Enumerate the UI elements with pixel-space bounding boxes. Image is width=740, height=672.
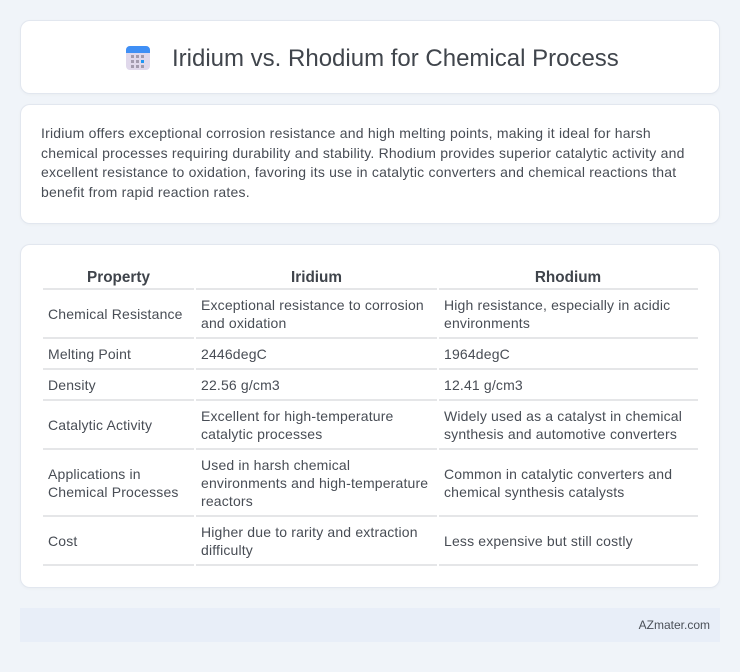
- row: melting point: Melting Point: [48, 346, 131, 362]
- chemical resistance: rhodium: [444, 297, 670, 331]
- applications: iridium: Used in harsh chemical: [201, 457, 350, 473]
- summary text: [41, 125, 685, 200]
- icon: calendar grid: [126, 46, 150, 70]
- row: applications in chemical processes: [48, 466, 179, 500]
- table header: rhodium: Rhodium: [535, 269, 601, 286]
- applications: iridium: [201, 457, 428, 509]
- row: applications in chemical processes: Applications in: [48, 466, 141, 482]
- catalytic activity: rhodium: [444, 408, 682, 442]
- chemical resistance: rhodium: High resistance, especially in acidic: [444, 297, 670, 313]
- catalytic activity: iridium: Excellent for high-temperature: [201, 408, 394, 424]
- cost: iridium: [201, 524, 418, 558]
- cost: iridium: Higher due to rarity and extraction: [201, 524, 418, 540]
- row: applications in chemical processes: Chemical Processes: [48, 484, 179, 500]
- row: cost: Cost: [48, 533, 77, 549]
- summary text: benefit from rapid reaction rates.: [41, 184, 250, 200]
- summary text: chemical processes requiring durability and stability. Rhodium provides superior catalytic activity and: [41, 144, 685, 160]
- density: rhodium: 12.41 g/cm3: [444, 377, 523, 393]
- row: catalytic activity: Catalytic Activity: [48, 417, 152, 433]
- chemical resistance: rhodium: environments: [444, 315, 530, 331]
- catalytic activity: rhodium: Widely used as a catalyst in chemical: [444, 408, 682, 424]
- summary text: excellent resistance to oxidation, favoring its use in catalytic converters and chemical reactions that: [41, 164, 676, 180]
- applications: rhodium: [444, 466, 672, 500]
- cost: rhodium: Less expensive but still costly: [444, 533, 633, 549]
- density: iridium: 22.56 g/cm3: [201, 377, 280, 393]
- cost: iridium: difficulty: [201, 542, 253, 558]
- chemical resistance: iridium: Exceptional resistance to corrosion: [201, 297, 424, 313]
- melting point: rhodium: 1964degC: [444, 346, 510, 362]
- applications: rhodium: Common in catalytic converters and: [444, 466, 672, 482]
- chemical resistance: iridium: [201, 297, 424, 331]
- table header: iridium: Iridium: [291, 269, 342, 286]
- catalytic activity: iridium: [201, 408, 394, 442]
- applications: iridium: environments and high-temperature: [201, 475, 428, 491]
- summary text: Iridium offers exceptional corrosion resistance and high melting points, making it ideal for harsh: [41, 125, 651, 141]
- header card: [20, 20, 720, 94]
- melting point: iridium: 2446degC: [201, 346, 267, 362]
- row: chemical resistance: Chemical Resistance: [48, 306, 183, 322]
- applications: iridium: reactors: [201, 493, 253, 509]
- footer bar: [20, 608, 720, 642]
- catalytic activity: iridium: catalytic processes: [201, 426, 322, 442]
- summary panel: [20, 104, 720, 224]
- table header: property: Property: [87, 269, 150, 286]
- row: density: Density: [48, 377, 96, 393]
- title: Iridium vs. Rhodium for Chemical Process: [172, 45, 619, 72]
- footer source credit: AZmater.com: [639, 618, 710, 632]
- catalytic activity: rhodium: synthesis and automotive converters: [444, 426, 677, 442]
- comparison table panel: [20, 244, 720, 588]
- applications: rhodium: chemical synthesis catalysts: [444, 484, 624, 500]
- chemical resistance: iridium: and oxidation: [201, 315, 286, 331]
